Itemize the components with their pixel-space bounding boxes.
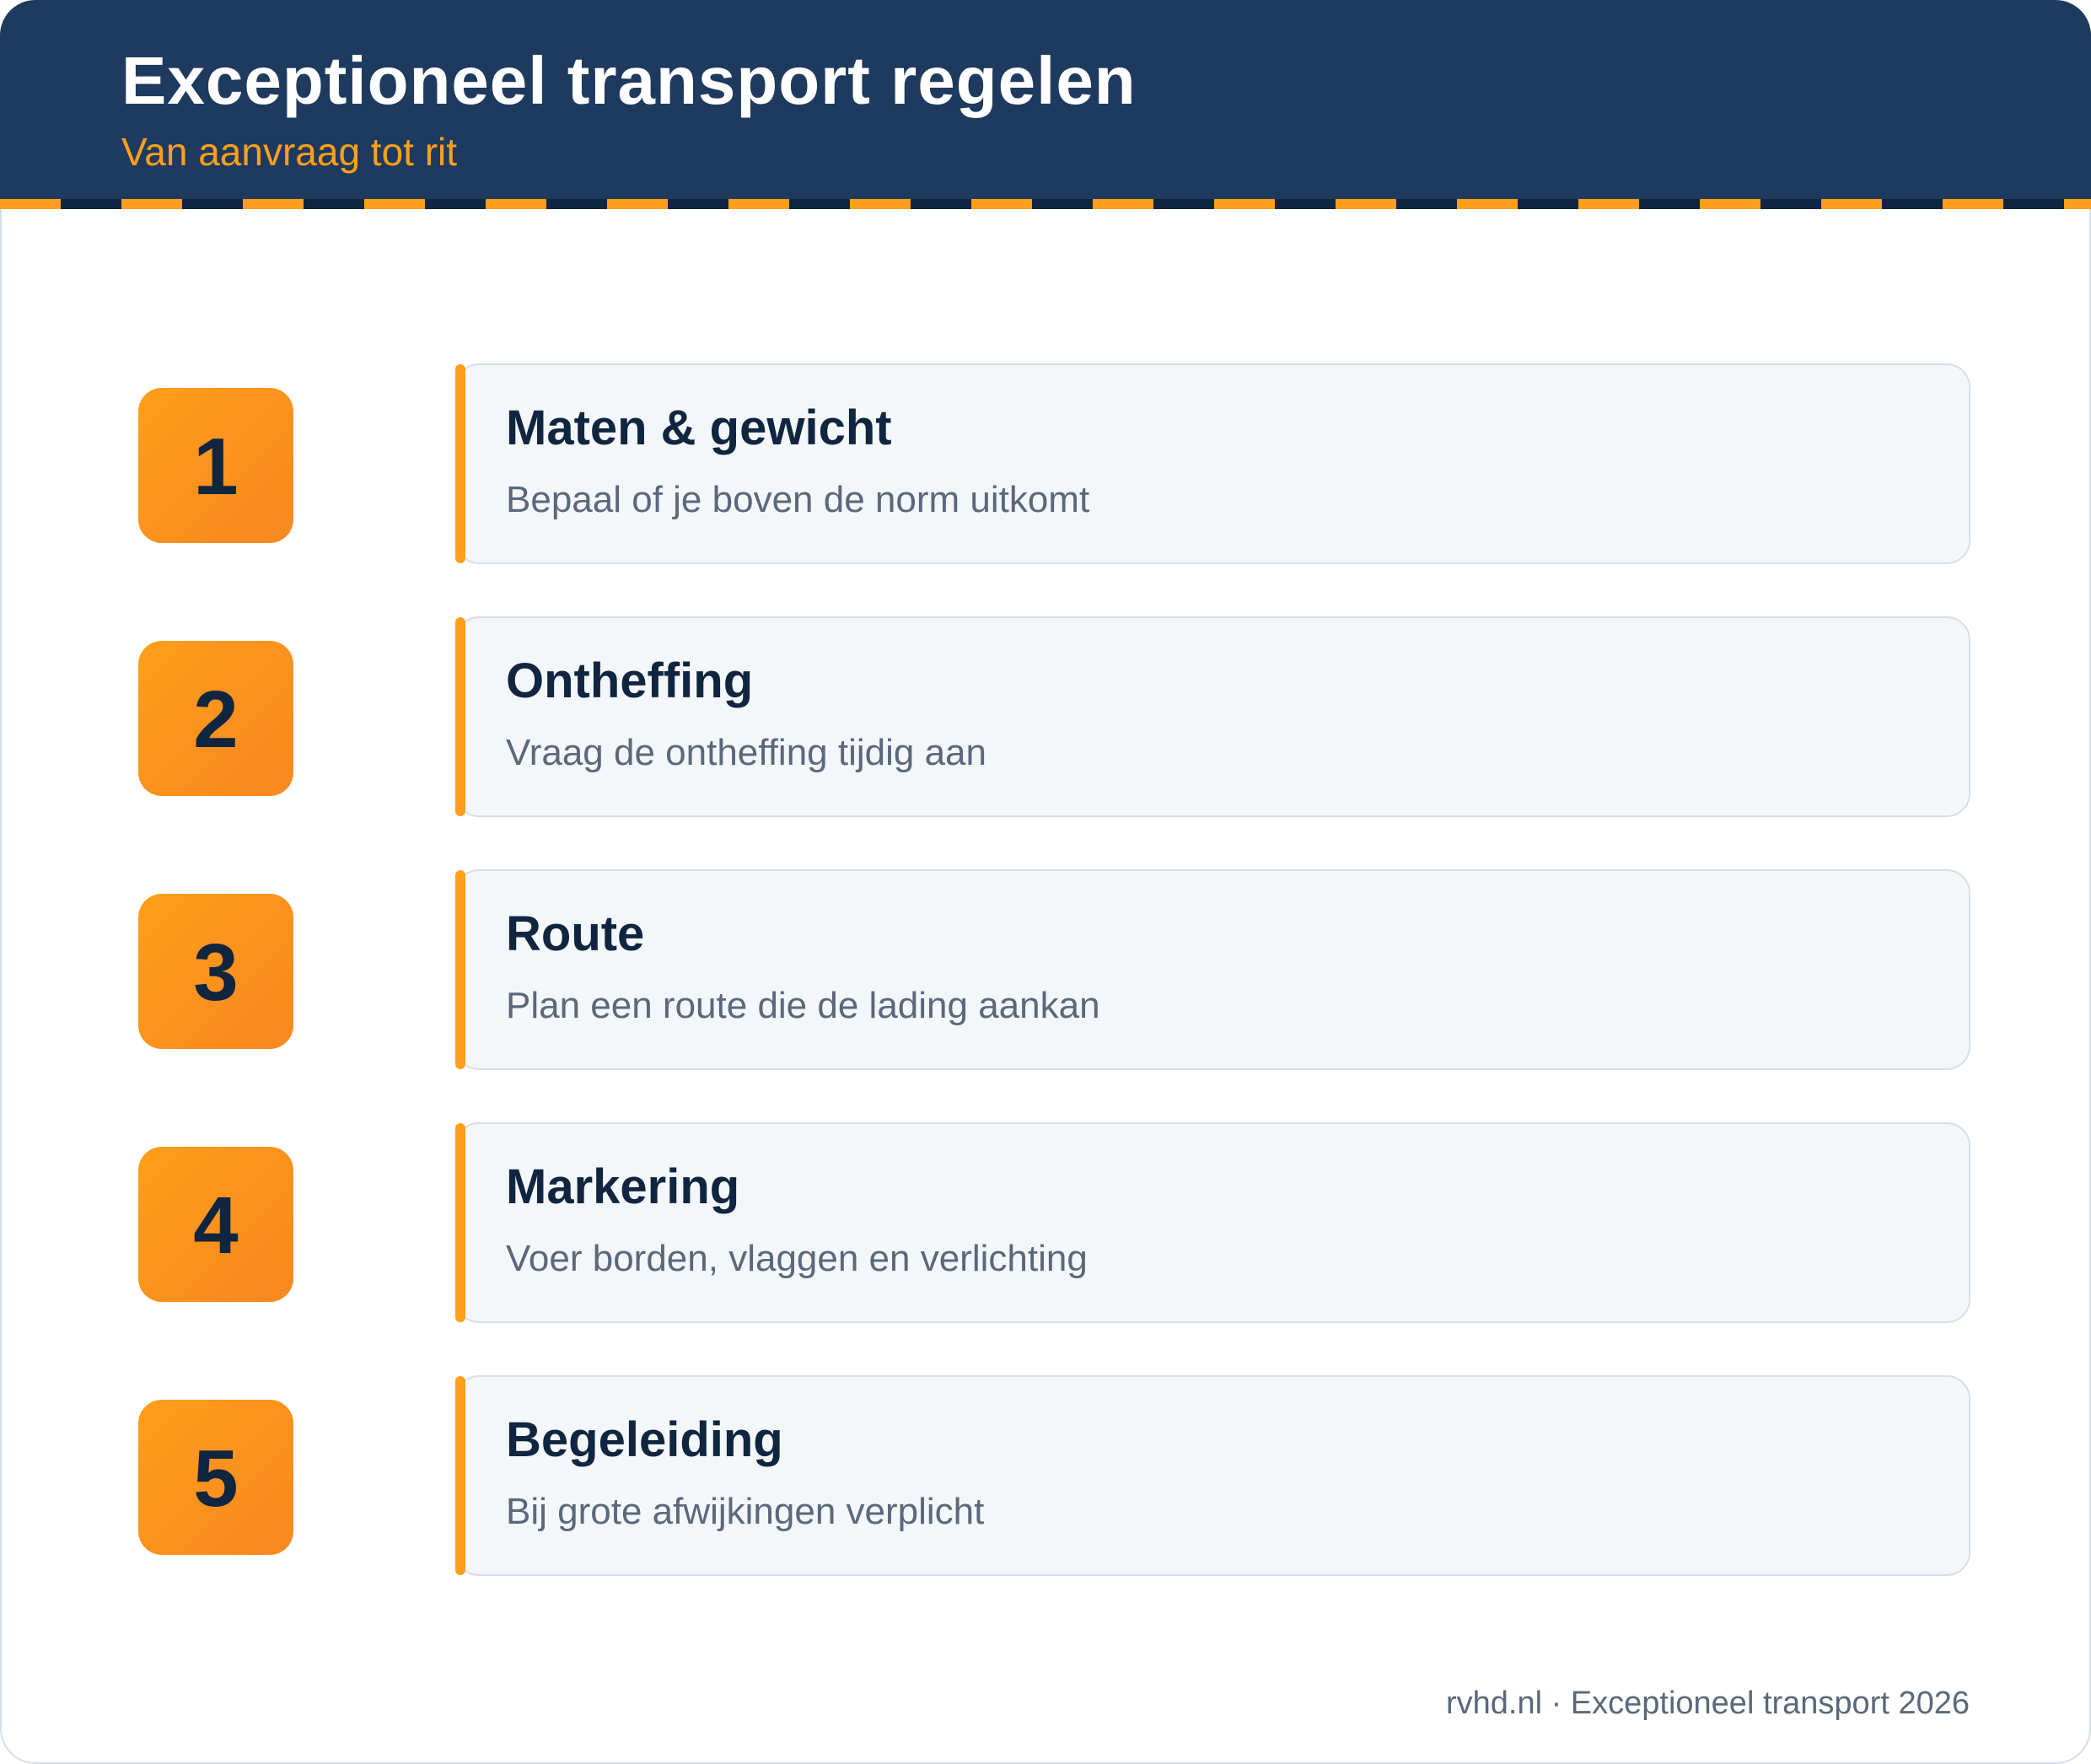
step 1	[138, 363, 1970, 564]
description 1: Bepaal of je boven de norm uitkomt	[506, 479, 1089, 520]
number badge 5: 5	[193, 1433, 239, 1524]
number badge 4: 4	[193, 1180, 239, 1271]
card 3	[455, 869, 1970, 1070]
heading 1: Maten & gewicht	[506, 401, 892, 455]
description 3: Plan een route die de lading aankan	[506, 985, 1100, 1026]
heading 3: Route	[506, 906, 644, 961]
number badge 2	[138, 641, 293, 796]
description 5: Bij grote afwijkingen verplicht	[506, 1491, 984, 1532]
card 1	[455, 363, 1970, 564]
step 2	[138, 616, 1970, 817]
number badge 5	[138, 1400, 293, 1555]
number badge 2: 2	[193, 675, 239, 765]
number badge 1	[138, 388, 293, 543]
card 4	[455, 1122, 1970, 1323]
accent bar 4	[455, 1123, 465, 1322]
subtitle: Van aanvraag tot rit	[121, 130, 457, 174]
step 3	[138, 869, 1970, 1070]
number badge 1: 1	[193, 422, 239, 512]
accent bar 3	[455, 870, 465, 1069]
step 4	[138, 1122, 1970, 1323]
step 5	[138, 1375, 1970, 1576]
accent bar 1	[455, 364, 465, 563]
accent bar 2	[455, 617, 465, 816]
title: Exceptioneel transport regelen	[121, 43, 1137, 118]
number badge 3	[138, 894, 293, 1049]
footer credit: rvhd.nl · Exceptioneel transport 2026	[1446, 1686, 1970, 1721]
number badge 4	[138, 1147, 293, 1302]
heading 4: Markering	[506, 1159, 739, 1214]
hazard stripe	[0, 199, 2091, 209]
accent bar 5	[455, 1376, 465, 1575]
description 2: Vraag de ontheffing tijdig aan	[506, 732, 986, 773]
heading 5: Begeleiding	[506, 1412, 783, 1467]
card 2	[455, 616, 1970, 817]
number badge 3: 3	[193, 928, 239, 1018]
header banner	[0, 0, 2091, 209]
description 4: Voer borden, vlaggen en verlichting	[506, 1238, 1088, 1279]
card 5	[455, 1375, 1970, 1576]
heading 2: Ontheffing	[506, 653, 753, 708]
